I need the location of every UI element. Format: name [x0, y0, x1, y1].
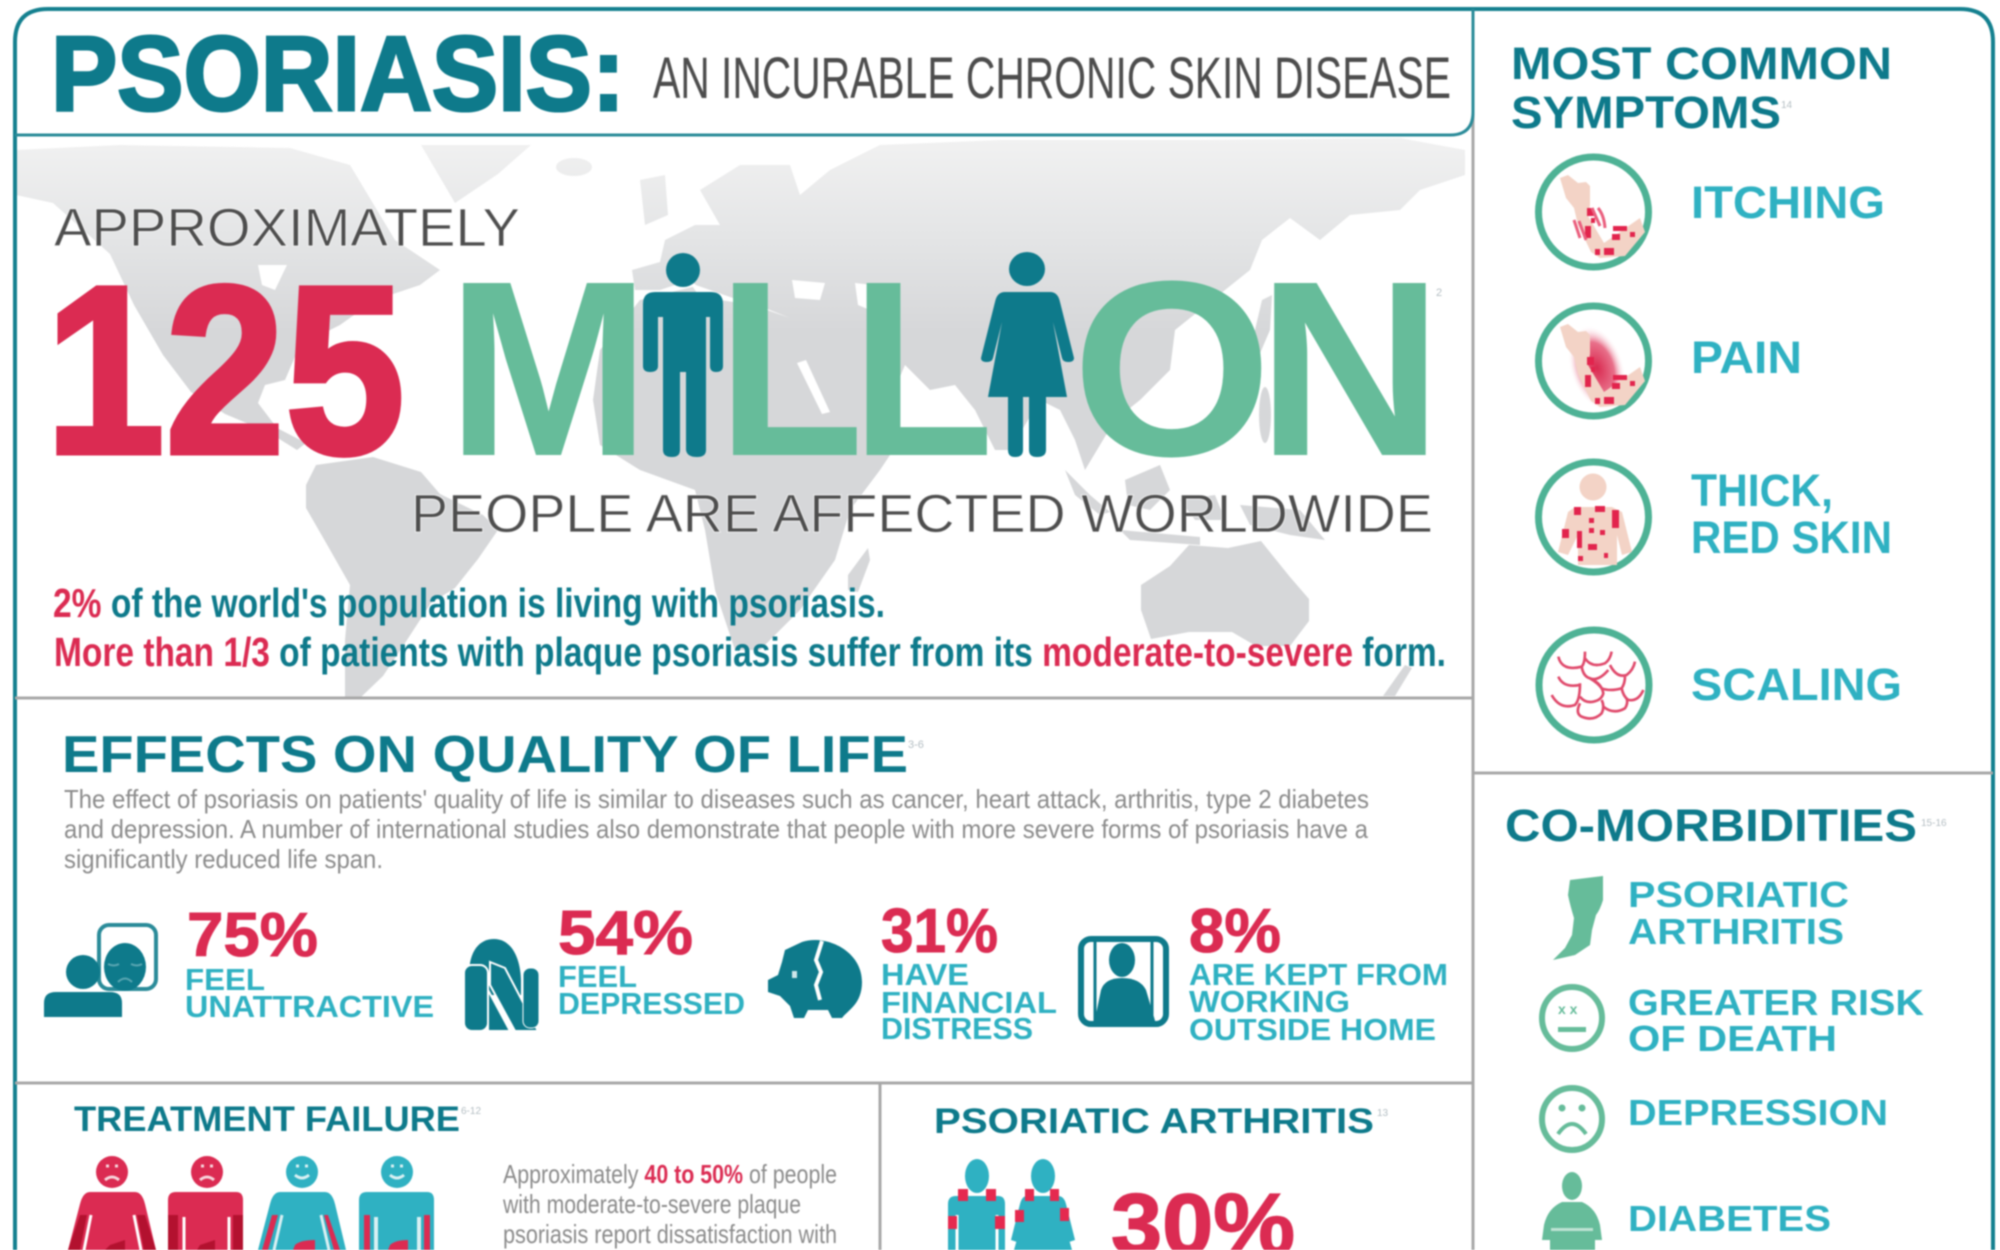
icon: scaling skin — [1539, 630, 1649, 740]
icon: sad face — [1542, 1088, 1602, 1150]
heading: CO-MORBIDITIES — [1505, 800, 1917, 851]
big word: million: M — [447, 229, 650, 508]
stat: 31 percent: FINANCIAL — [881, 985, 1057, 1020]
subtitle: AN INCURABLE CHRONIC SKIN DISEASE — [653, 46, 1451, 111]
stat: 8 percent: ARE KEPT FROM — [1189, 957, 1448, 992]
stat: 8 percent: 8% — [1189, 897, 1281, 966]
stat: 54 percent — [558, 899, 745, 1021]
statistic line two: More than 1/3 of patients with plaque psoriasis suffer from its moderate-to-severe form. — [54, 629, 1446, 675]
heading: EFFECTS ON QUALITY OF LIFE — [62, 726, 908, 784]
label: psoriatic arthritis: ARTHRITIS — [1628, 911, 1844, 952]
heading — [1511, 38, 1892, 138]
label: greater risk of death: OF DEATH — [1628, 1018, 1837, 1059]
big number: 125: 125 — [45, 236, 405, 504]
heading: TREATMENT FAILURE — [74, 1100, 460, 1139]
label: greater risk of death — [1628, 982, 1924, 1059]
statistic line one: 2% of the world's population is living with psoriasis. — [53, 580, 885, 626]
description: The effect of psoriasis on patients' quality of life is similar to diseases such as cancer, heart attack, arthritis, type 2 diabetes — [64, 784, 1369, 814]
icon: person behind window bars — [1081, 939, 1166, 1024]
icon: itching arm — [1538, 157, 1648, 267]
stat: 75 percent: 75% — [187, 901, 318, 970]
label: depression: DEPRESSION — [1628, 1092, 1888, 1133]
icon: unhappy man — [168, 1156, 243, 1250]
description: with moderate-to-severe plaque — [502, 1189, 801, 1219]
description — [64, 784, 1369, 874]
icon: unhappy woman — [68, 1156, 156, 1250]
big word: million — [447, 229, 1443, 508]
footnote marker: 14 — [1781, 100, 1793, 111]
description: Approximately 40 to 50% of people — [503, 1159, 837, 1189]
stat: 31 percent: HAVE — [881, 957, 969, 992]
stat: 75 percent — [185, 901, 434, 1024]
label: thick red skin: RED SKIN — [1691, 512, 1892, 563]
stat: 8 percent: WORKING — [1189, 984, 1350, 1019]
stat: 75 percent: FEEL — [185, 962, 265, 997]
icon: happy man — [359, 1156, 434, 1250]
icon: woman with red joints — [1011, 1159, 1075, 1250]
label: diabetes: DIABETES — [1628, 1198, 1831, 1239]
label: psoriatic arthritis — [1628, 874, 1849, 952]
panel: co-morbidities — [1505, 800, 1947, 1250]
heading: people affected: PEOPLE ARE AFFECTED WORLDWIDE — [411, 484, 1433, 544]
footnote marker: 3-6 — [908, 739, 924, 751]
stat: 8 percent — [1189, 897, 1448, 1047]
big word: million: N — [1257, 229, 1443, 508]
stat: 54 percent: FEEL — [558, 959, 637, 994]
stat: 31 percent: DISTRESS — [881, 1011, 1033, 1046]
stat: 31 percent: 31% — [881, 897, 998, 966]
icon: thick red skin body — [1538, 462, 1648, 572]
description: and depression. A number of international studies also demonstrate that people with more severe forms of psoriasis have a — [64, 814, 1368, 844]
map water cut-outs — [258, 265, 873, 422]
label: pain: PAIN — [1691, 332, 1802, 383]
heading: approximately: APPROXIMATELY — [54, 198, 520, 258]
icon: woman as letter I — [981, 252, 1074, 457]
panel: effects on quality of life — [44, 726, 1448, 1047]
icon: person at mirror — [44, 925, 156, 1017]
label: thick red skin: THICK, — [1691, 465, 1833, 516]
big word: million: L — [851, 229, 994, 508]
stat: 31 percent — [881, 897, 1057, 1046]
stat: 54 percent: DEPRESSED — [558, 986, 745, 1021]
label: greater risk of death: GREATER RISK — [1628, 982, 1924, 1023]
footnote marker: 2 — [1436, 287, 1442, 299]
icon: happy woman — [258, 1156, 346, 1250]
icon: dead face — [1542, 987, 1602, 1049]
panel: most common symptoms — [1511, 38, 1902, 740]
footnote marker: 6-12 — [461, 1106, 481, 1117]
heading: PSORIATIC ARTHRITIS — [934, 1102, 1374, 1141]
header box outline — [15, 9, 1473, 135]
footnote marker: 13 — [1377, 1108, 1389, 1119]
world map background — [16, 138, 1465, 698]
title: PSORIASIS: — [51, 15, 625, 133]
heading: SYMPTOMS — [1511, 87, 1781, 138]
big word: million: L — [717, 229, 864, 508]
label: scaling: SCALING — [1691, 659, 1902, 710]
stat: 54 percent: 54% — [558, 899, 693, 968]
icon: dead face: x x — [1558, 1001, 1578, 1017]
panel: psoriatic arthritis — [934, 1102, 1389, 1250]
icon: man as letter I — [643, 253, 723, 457]
icon: man with red joints — [948, 1159, 1005, 1250]
big word: million: O — [1072, 229, 1272, 508]
heading: MOST COMMON — [1511, 38, 1892, 89]
label: psoriatic arthritis: PSORIATIC — [1628, 874, 1849, 915]
icon: depressed person — [464, 939, 539, 1031]
label: itching: ITCHING — [1691, 177, 1885, 228]
icon: leg — [1553, 876, 1603, 960]
icon: broken piggy bank — [768, 940, 862, 1018]
description: psoriasis report dissatisfaction with — [503, 1219, 837, 1249]
description: significantly reduced life span. — [64, 844, 383, 874]
icon: painful arm — [1538, 306, 1648, 418]
stat: 75 percent: UNATTRACTIVE — [185, 989, 434, 1024]
icon: overweight figure — [1542, 1172, 1602, 1250]
label: thick red skin — [1691, 465, 1892, 563]
description — [502, 1159, 837, 1249]
stat: 8 percent: OUTSIDE HOME — [1189, 1012, 1436, 1047]
panel: treatment failure — [68, 1100, 837, 1250]
footnote marker: 15-16 — [1921, 818, 1947, 829]
